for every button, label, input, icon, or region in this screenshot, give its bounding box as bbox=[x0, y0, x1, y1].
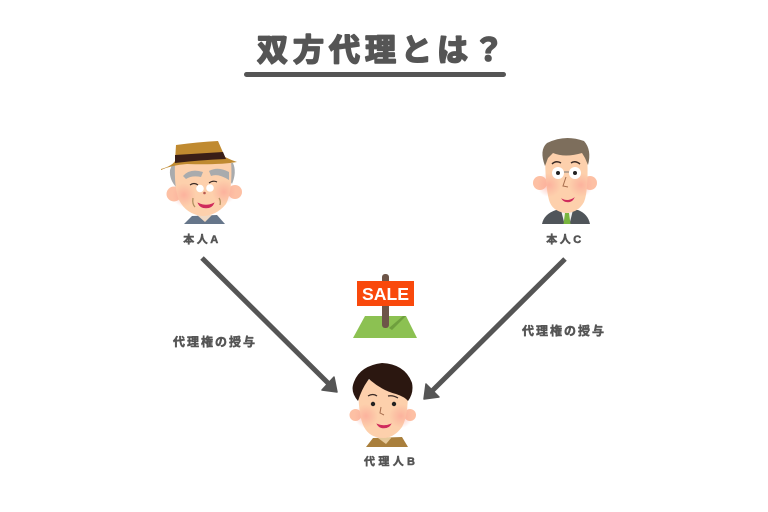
mouth bbox=[377, 424, 391, 428]
hat band bbox=[175, 152, 226, 163]
person: principal C bbox=[533, 138, 597, 224]
mouth bbox=[198, 203, 214, 208]
person: agent B bbox=[350, 363, 416, 447]
label: principal A: 本人A bbox=[183, 232, 221, 246]
ears bbox=[350, 409, 362, 421]
arrow: C to B bbox=[424, 259, 565, 399]
label: grant of agency right: 代理権の授与 bbox=[522, 323, 604, 338]
tie bbox=[564, 213, 570, 224]
front hair bbox=[183, 171, 203, 179]
wrinkles bbox=[193, 198, 220, 207]
icon: sale sign bbox=[353, 274, 417, 338]
ears bbox=[533, 176, 547, 190]
title: 双方代理とは？ bbox=[257, 33, 504, 68]
jacket bbox=[184, 215, 225, 224]
sale text: SALE bbox=[362, 284, 409, 304]
person: principal A bbox=[161, 141, 242, 224]
suit bbox=[542, 210, 590, 224]
board bbox=[357, 281, 414, 306]
label: agent B: 代理人B bbox=[364, 455, 415, 468]
nose bbox=[380, 407, 384, 415]
mouth bbox=[562, 198, 574, 202]
ears bbox=[166, 186, 182, 202]
grey side hair bbox=[170, 165, 180, 188]
grass bbox=[353, 316, 417, 338]
glasses and eyes bbox=[196, 185, 204, 192]
hair bbox=[353, 363, 412, 401]
label: grant of agency left: 代理権の授与 bbox=[173, 334, 255, 349]
nose bbox=[563, 177, 568, 187]
glasses and eyes bbox=[552, 167, 564, 179]
eyes and brows bbox=[371, 402, 375, 406]
hat bbox=[161, 141, 237, 170]
post bbox=[382, 274, 389, 328]
face bbox=[175, 160, 231, 216]
face bbox=[358, 380, 408, 438]
jacket bbox=[366, 437, 408, 447]
hair bbox=[542, 138, 589, 166]
face bbox=[545, 150, 588, 213]
title underline bbox=[244, 72, 506, 77]
label: principal C: 本人C bbox=[546, 232, 584, 246]
arrow: A to B bbox=[202, 258, 337, 392]
